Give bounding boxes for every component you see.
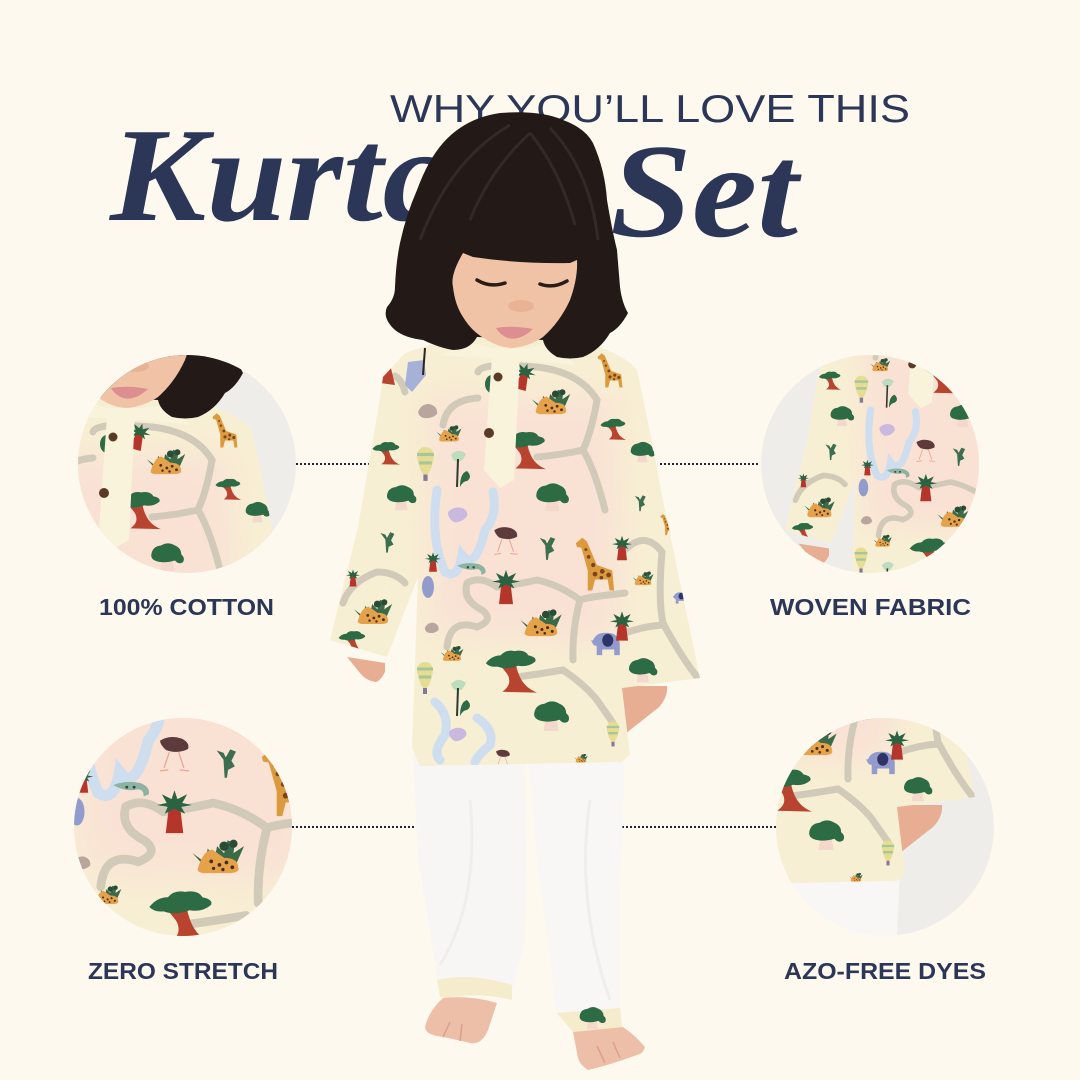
trousers bbox=[413, 755, 625, 1032]
motifs: middle and hem bbox=[339, 508, 688, 766]
motifs: chest and sleeves bbox=[372, 348, 655, 511]
label: zero stretch: ZERO STRETCH bbox=[88, 958, 278, 984]
label: azo-free dyes: AZO-FREE DYES bbox=[784, 958, 986, 984]
feet bbox=[425, 997, 645, 1070]
title: Kurta Set bbox=[109, 101, 802, 265]
collar bbox=[440, 344, 575, 365]
child figure bbox=[328, 112, 700, 1070]
hair bbox=[386, 112, 628, 358]
circle: woven fabric detail bbox=[761, 355, 979, 573]
title: Kurta Set: Set bbox=[610, 117, 802, 265]
upper body bbox=[328, 112, 700, 768]
pink fabric wash bbox=[425, 395, 622, 645]
rivers bbox=[435, 490, 494, 762]
roads bbox=[343, 365, 697, 723]
mouth bbox=[496, 327, 533, 339]
label: 100% cotton: 100% COTTON bbox=[99, 594, 274, 620]
face bbox=[452, 253, 577, 348]
placket bbox=[484, 352, 520, 488]
dotted connector lines bbox=[292, 464, 776, 827]
title: Kurta Set: Kurta bbox=[109, 101, 455, 249]
circle: zero stretch detail bbox=[74, 718, 292, 936]
nose shadow bbox=[508, 300, 534, 312]
eyes bbox=[477, 280, 567, 286]
circle: 100% cotton detail bbox=[78, 355, 296, 573]
label: woven fabric: WOVEN FABRIC bbox=[770, 594, 971, 620]
circle: azo-free dyes detail bbox=[776, 718, 994, 935]
buttons bbox=[484, 372, 502, 438]
kurta bbox=[328, 336, 700, 768]
hands bbox=[347, 657, 667, 734]
heading: why you'll love this: WHY YOU’LL LOVE THIS bbox=[390, 88, 910, 131]
